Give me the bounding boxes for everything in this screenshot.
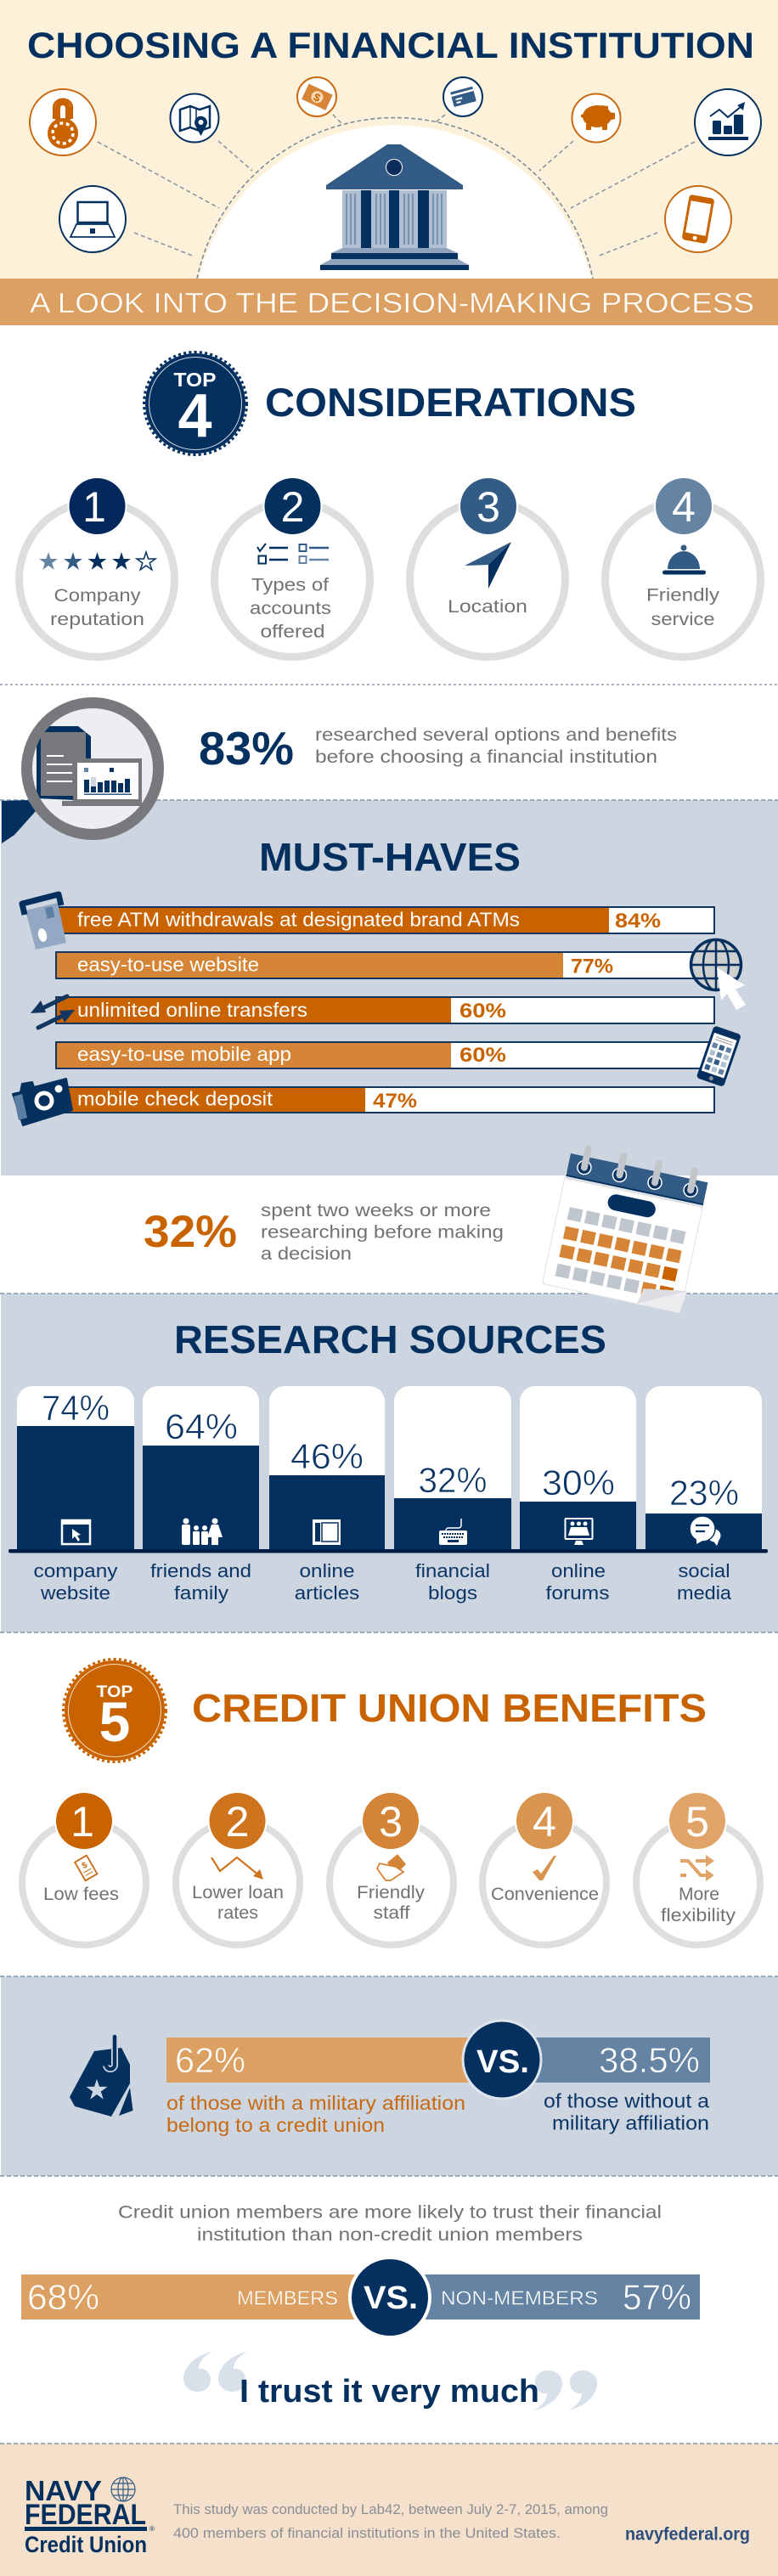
icon: camera [13, 1079, 72, 1125]
chart baseline [8, 1549, 768, 1553]
icon: magnifying glass over documents [2, 703, 158, 843]
consideration 4: friendly service: Friendly [646, 586, 720, 605]
icon: dollar bill: $ [312, 90, 323, 104]
icon: smartphone with app grid [696, 1025, 741, 1087]
icon: map [170, 93, 219, 143]
heading: CONSIDERATIONS [265, 380, 636, 425]
study note [173, 2501, 608, 2541]
vs badge [350, 2258, 430, 2337]
icon: transfer arrows [31, 996, 75, 1028]
figure: 83% [199, 722, 294, 775]
bar: 38.5% [531, 2038, 710, 2083]
description: researching before making [261, 1223, 504, 1242]
figure: 32% [144, 1207, 237, 1257]
column: online articles 46% [269, 1386, 385, 1604]
panel: top 5 credit union benefits [22, 1660, 760, 1945]
logo: Navy Federal Credit Union: FEDERAL [25, 2499, 146, 2531]
badge: top 5: TOP [97, 1683, 133, 1701]
benefit 3: friendly staff: staff [374, 1903, 410, 1923]
logo: Navy Federal Credit Union [25, 2475, 155, 2557]
consideration 1: company reputation: Company [54, 586, 141, 606]
consideration 4: friendly service [605, 476, 761, 657]
caption: with military affiliation: of those with a military affiliation [166, 2092, 465, 2114]
bar: 62% [166, 2038, 472, 2083]
caption: without military affiliation: of those without a [544, 2089, 709, 2111]
panel: header [0, 0, 778, 325]
panel: must-haves [0, 800, 778, 1175]
column: friends and family 64%: 64% [165, 1406, 238, 1446]
intro text [118, 2203, 662, 2245]
bar: easy-to-use website 77%: 77% [571, 955, 613, 978]
quote marks [183, 2352, 597, 2410]
consideration 2: types of accounts offered [214, 476, 370, 657]
bar: free ATM withdrawals 84%: free ATM withdrawals at designated brand ATMs [77, 909, 520, 931]
panel: top 4 considerations [19, 352, 761, 657]
bar: non-members 57%: 57% [623, 2277, 691, 2317]
column: friends and family 64% [143, 1386, 259, 1604]
badge: top 4: TOP [173, 369, 216, 391]
intro text: Credit union members are more likely to trust their financial [118, 2203, 662, 2222]
caption: with military affiliation [166, 2092, 465, 2136]
consideration 2: types of accounts offered: 2 [281, 483, 304, 531]
consideration 1: company reputation: 1 [82, 483, 106, 531]
bar: free ATM withdrawals 84%: 84% [615, 910, 661, 933]
description: a decision [261, 1244, 352, 1264]
benefit 5: more flexibility: flexibility [661, 1906, 736, 1925]
logo: Navy Federal Credit Union: ® [149, 2525, 155, 2533]
benefit 2: lower loan rates: rates [217, 1903, 258, 1923]
consideration 3: location [409, 476, 566, 657]
icon: growth chart [695, 89, 761, 155]
consideration 2: types of accounts offered: accounts [250, 599, 331, 618]
consideration 1: company reputation: reputation [50, 610, 144, 629]
study note: 400 members of financial institutions in the United States. [173, 2525, 561, 2541]
column: online forums 30% [520, 1386, 636, 1604]
column: online articles 46%: articles [295, 1582, 359, 1604]
benefit 3: friendly staff: 3 [379, 1798, 403, 1846]
badge: top 5: 5 [99, 1690, 130, 1753]
bar: non-members 57%: NON-MEMBERS [441, 2286, 598, 2308]
column: online forums 30%: 30% [542, 1463, 615, 1502]
icon: credit card [443, 77, 482, 116]
subtitle band [0, 279, 778, 325]
benefit 1: low fees: Low fees [43, 1885, 119, 1904]
bar: members 68%: MEMBERS [237, 2286, 338, 2308]
badge: top 4: 4 [178, 382, 212, 450]
benefit 4: convenience: Convenience [491, 1885, 599, 1904]
description: researched several options and benefits [315, 725, 677, 745]
bar: members 68%: 68% [27, 2277, 99, 2317]
caption: without military affiliation [544, 2089, 709, 2134]
column: financial blogs 32%: blogs [428, 1582, 477, 1604]
website: navyfederal.org [625, 2524, 750, 2545]
caption: with military affiliation: belong to a credit union [166, 2114, 385, 2136]
column: friends and family 64%: family [174, 1582, 228, 1604]
column: financial blogs 32% [394, 1386, 511, 1604]
column: company website 74%: website [40, 1582, 110, 1604]
icon: globe and cursor [691, 939, 746, 1010]
column: company website 74%: 74% [42, 1388, 110, 1428]
title: CHOOSING A FINANCIAL INSTITUTION [27, 25, 754, 66]
panel: trust comparison [21, 2203, 700, 2410]
white dome [199, 125, 591, 279]
consideration 1: company reputation [19, 476, 175, 657]
description [261, 1201, 504, 1264]
column: financial blogs 32%: 32% [418, 1460, 488, 1500]
icon: bank building [320, 144, 469, 270]
bar: easy-to-use website 77%: easy-to-use website [77, 953, 259, 975]
panel: military affiliation comparison [0, 1976, 778, 2176]
column: company website 74% [17, 1386, 134, 1604]
logo: Navy Federal Credit Union: NAVY [25, 2475, 102, 2506]
column: company website 74%: company [34, 1560, 117, 1581]
study note: This study was conducted by Lab42, between July 2-7, 2015, among [173, 2501, 608, 2517]
benefit 2: lower loan rates [176, 1791, 300, 1945]
heading: CREDIT UNION BENEFITS [192, 1686, 707, 1730]
benefit 1: low fees [22, 1791, 146, 1945]
bar: 38.5%: 38.5% [599, 2040, 700, 2080]
icon: ATM card [22, 894, 66, 950]
description: before choosing a financial institution [315, 747, 657, 767]
vs badge [463, 2021, 541, 2099]
logo: Navy Federal Credit Union: Credit Union [25, 2532, 147, 2557]
description: spent two weeks or more [261, 1201, 491, 1220]
icon: calendar [542, 1145, 712, 1313]
vs badge: VS. [476, 2044, 529, 2080]
bar: free ATM withdrawals 84% [56, 907, 714, 933]
consideration 2: types of accounts offered: Types of [251, 576, 329, 595]
bar: unlimited online transfers 60%: unlimited online transfers [77, 999, 307, 1021]
column: social media 23%: media [677, 1582, 732, 1604]
description [315, 725, 677, 767]
benefit 1: low fees: $ [81, 1860, 89, 1871]
benefit 4: convenience: 4 [533, 1798, 556, 1846]
column: social media 23% [646, 1386, 762, 1604]
benefit 3: friendly staff [330, 1791, 454, 1945]
column: social media 23%: 23% [669, 1473, 739, 1513]
consideration 2: types of accounts offered: offered [260, 622, 324, 642]
benefit 5: more flexibility [636, 1791, 760, 1945]
icon: laptop [59, 186, 126, 252]
column: online articles 46%: 46% [290, 1436, 364, 1476]
caption: without military affiliation: military affiliation [552, 2111, 709, 2134]
benefit 3: friendly staff: Friendly [357, 1883, 426, 1902]
benefit 1: low fees: 1 [70, 1798, 94, 1846]
column: friends and family 64%: friends and [150, 1560, 251, 1581]
consideration 4: friendly service: service [651, 610, 715, 629]
panel: footer [0, 2444, 778, 2576]
benefit 2: lower loan rates: Lower loan [192, 1883, 284, 1902]
column: online forums 30%: forums [545, 1582, 610, 1604]
icon: dollar bill [297, 77, 336, 116]
bar: mobile check deposit 47%: mobile check deposit [77, 1087, 273, 1109]
bar: unlimited online transfers 60% [56, 997, 714, 1023]
column: social media 23%: social [678, 1560, 730, 1581]
consideration 4: friendly service: 4 [672, 483, 696, 531]
badge: top 4 [144, 352, 246, 455]
heading: MUST-HAVES [259, 835, 521, 879]
consideration 3: location: Location [448, 597, 527, 617]
bar: mobile check deposit 47% [56, 1087, 714, 1113]
icon: dog tag [70, 2037, 132, 2117]
benefit 4: convenience [482, 1791, 606, 1945]
bar: mobile check deposit 47%: 47% [373, 1090, 417, 1113]
bar: unlimited online transfers 60%: 60% [459, 1000, 506, 1023]
heading: RESEARCH SOURCES [174, 1317, 606, 1361]
benefit 5: more flexibility: 5 [685, 1798, 709, 1846]
bar: easy-to-use website 77% [56, 952, 714, 978]
bar: easy-to-use mobile app 60%: easy-to-use mobile app [77, 1043, 291, 1065]
bar: 62%: 62% [175, 2040, 245, 2080]
consideration 3: location: 3 [476, 483, 500, 531]
column: financial blogs 32%: financial [415, 1560, 490, 1581]
bar: easy-to-use mobile app 60% [56, 1042, 714, 1068]
bar: easy-to-use mobile app 60%: 60% [459, 1044, 506, 1067]
bar: members 68% [21, 2274, 361, 2320]
panel: research sources [0, 1294, 778, 1632]
column: online articles 46%: online [299, 1560, 355, 1581]
vs badge: VS. [364, 2280, 418, 2316]
icon: piggy bank [572, 93, 620, 143]
benefit 2: lower loan rates: 2 [226, 1798, 249, 1846]
quote text: I trust it very much [240, 2374, 539, 2410]
benefit 5: more flexibility: More [679, 1885, 719, 1904]
badge: top 5 [63, 1660, 166, 1761]
bar: non-members 57% [416, 2274, 700, 2320]
subtitle band: A LOOK INTO THE DECISION-MAKING PROCESS [30, 287, 754, 318]
icon: combination lock [30, 89, 96, 155]
icon: smartphone [665, 186, 731, 252]
column: online forums 30%: online [551, 1560, 606, 1581]
stat: 32% spent two weeks or more [144, 1145, 712, 1313]
stat: 83% researched several options [2, 703, 677, 843]
intro text: institution than non-credit union members [197, 2225, 583, 2245]
